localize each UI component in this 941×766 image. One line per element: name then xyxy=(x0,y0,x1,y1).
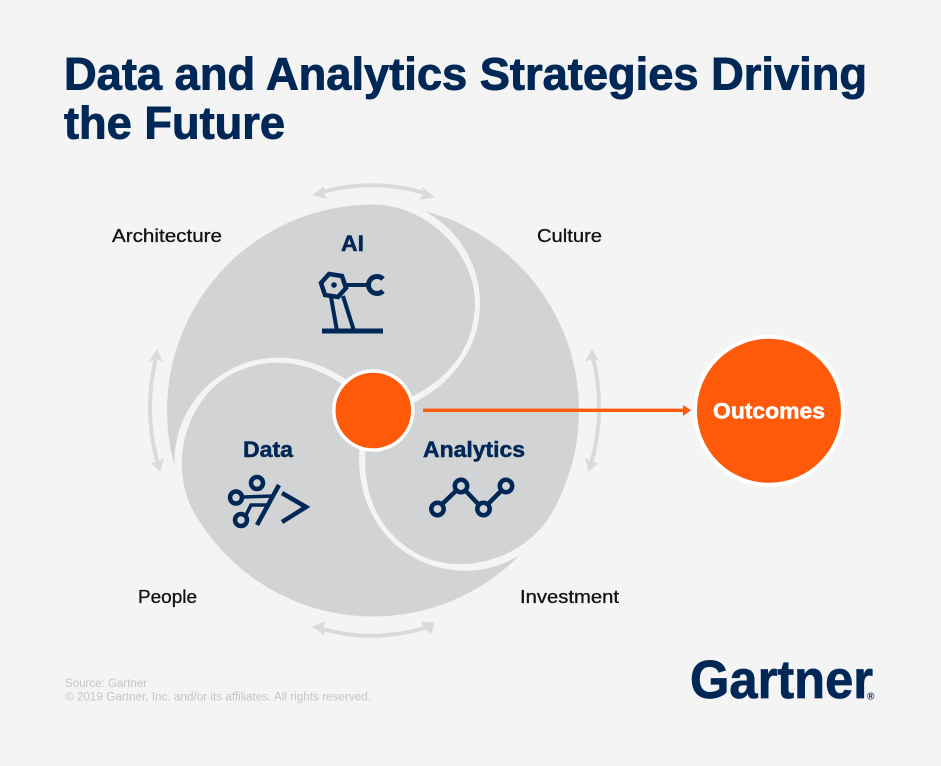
source note: Source: Gartner xyxy=(65,678,147,690)
arrow: right cycle xyxy=(586,350,599,471)
center orange circle xyxy=(334,371,413,450)
Gartner logo: ® xyxy=(867,692,875,702)
arrow: bottom cycle xyxy=(313,622,434,636)
title xyxy=(64,48,867,148)
swirl diagram: three segments xyxy=(140,203,579,616)
heading: Data: Data xyxy=(243,437,294,462)
source note: © 2019 Gartner, Inc. and/or its affiliates. All rights reserved. xyxy=(65,692,371,704)
icon: data flow xyxy=(230,477,306,526)
Gartner logo: Gartner xyxy=(690,650,873,710)
heading: AI: AI xyxy=(341,231,364,256)
source note xyxy=(65,678,371,704)
title: the Future xyxy=(64,98,285,148)
title: Data and Analytics Strategies Driving xyxy=(64,48,867,100)
label: People: People xyxy=(138,586,197,607)
arrow to outcomes xyxy=(423,405,691,416)
icon: line chart xyxy=(431,480,512,515)
label: Investment: Investment xyxy=(520,586,619,607)
label: Culture: Culture xyxy=(537,225,602,246)
outcomes circle: Outcomes xyxy=(713,398,825,424)
outcomes circle xyxy=(695,337,843,485)
arrow: left cycle xyxy=(150,350,163,471)
arrow: top cycle xyxy=(313,185,434,199)
icon: robot arm xyxy=(321,274,383,331)
heading: Analytics: Analytics xyxy=(423,437,525,462)
label: Architecture: Architecture xyxy=(112,225,222,246)
